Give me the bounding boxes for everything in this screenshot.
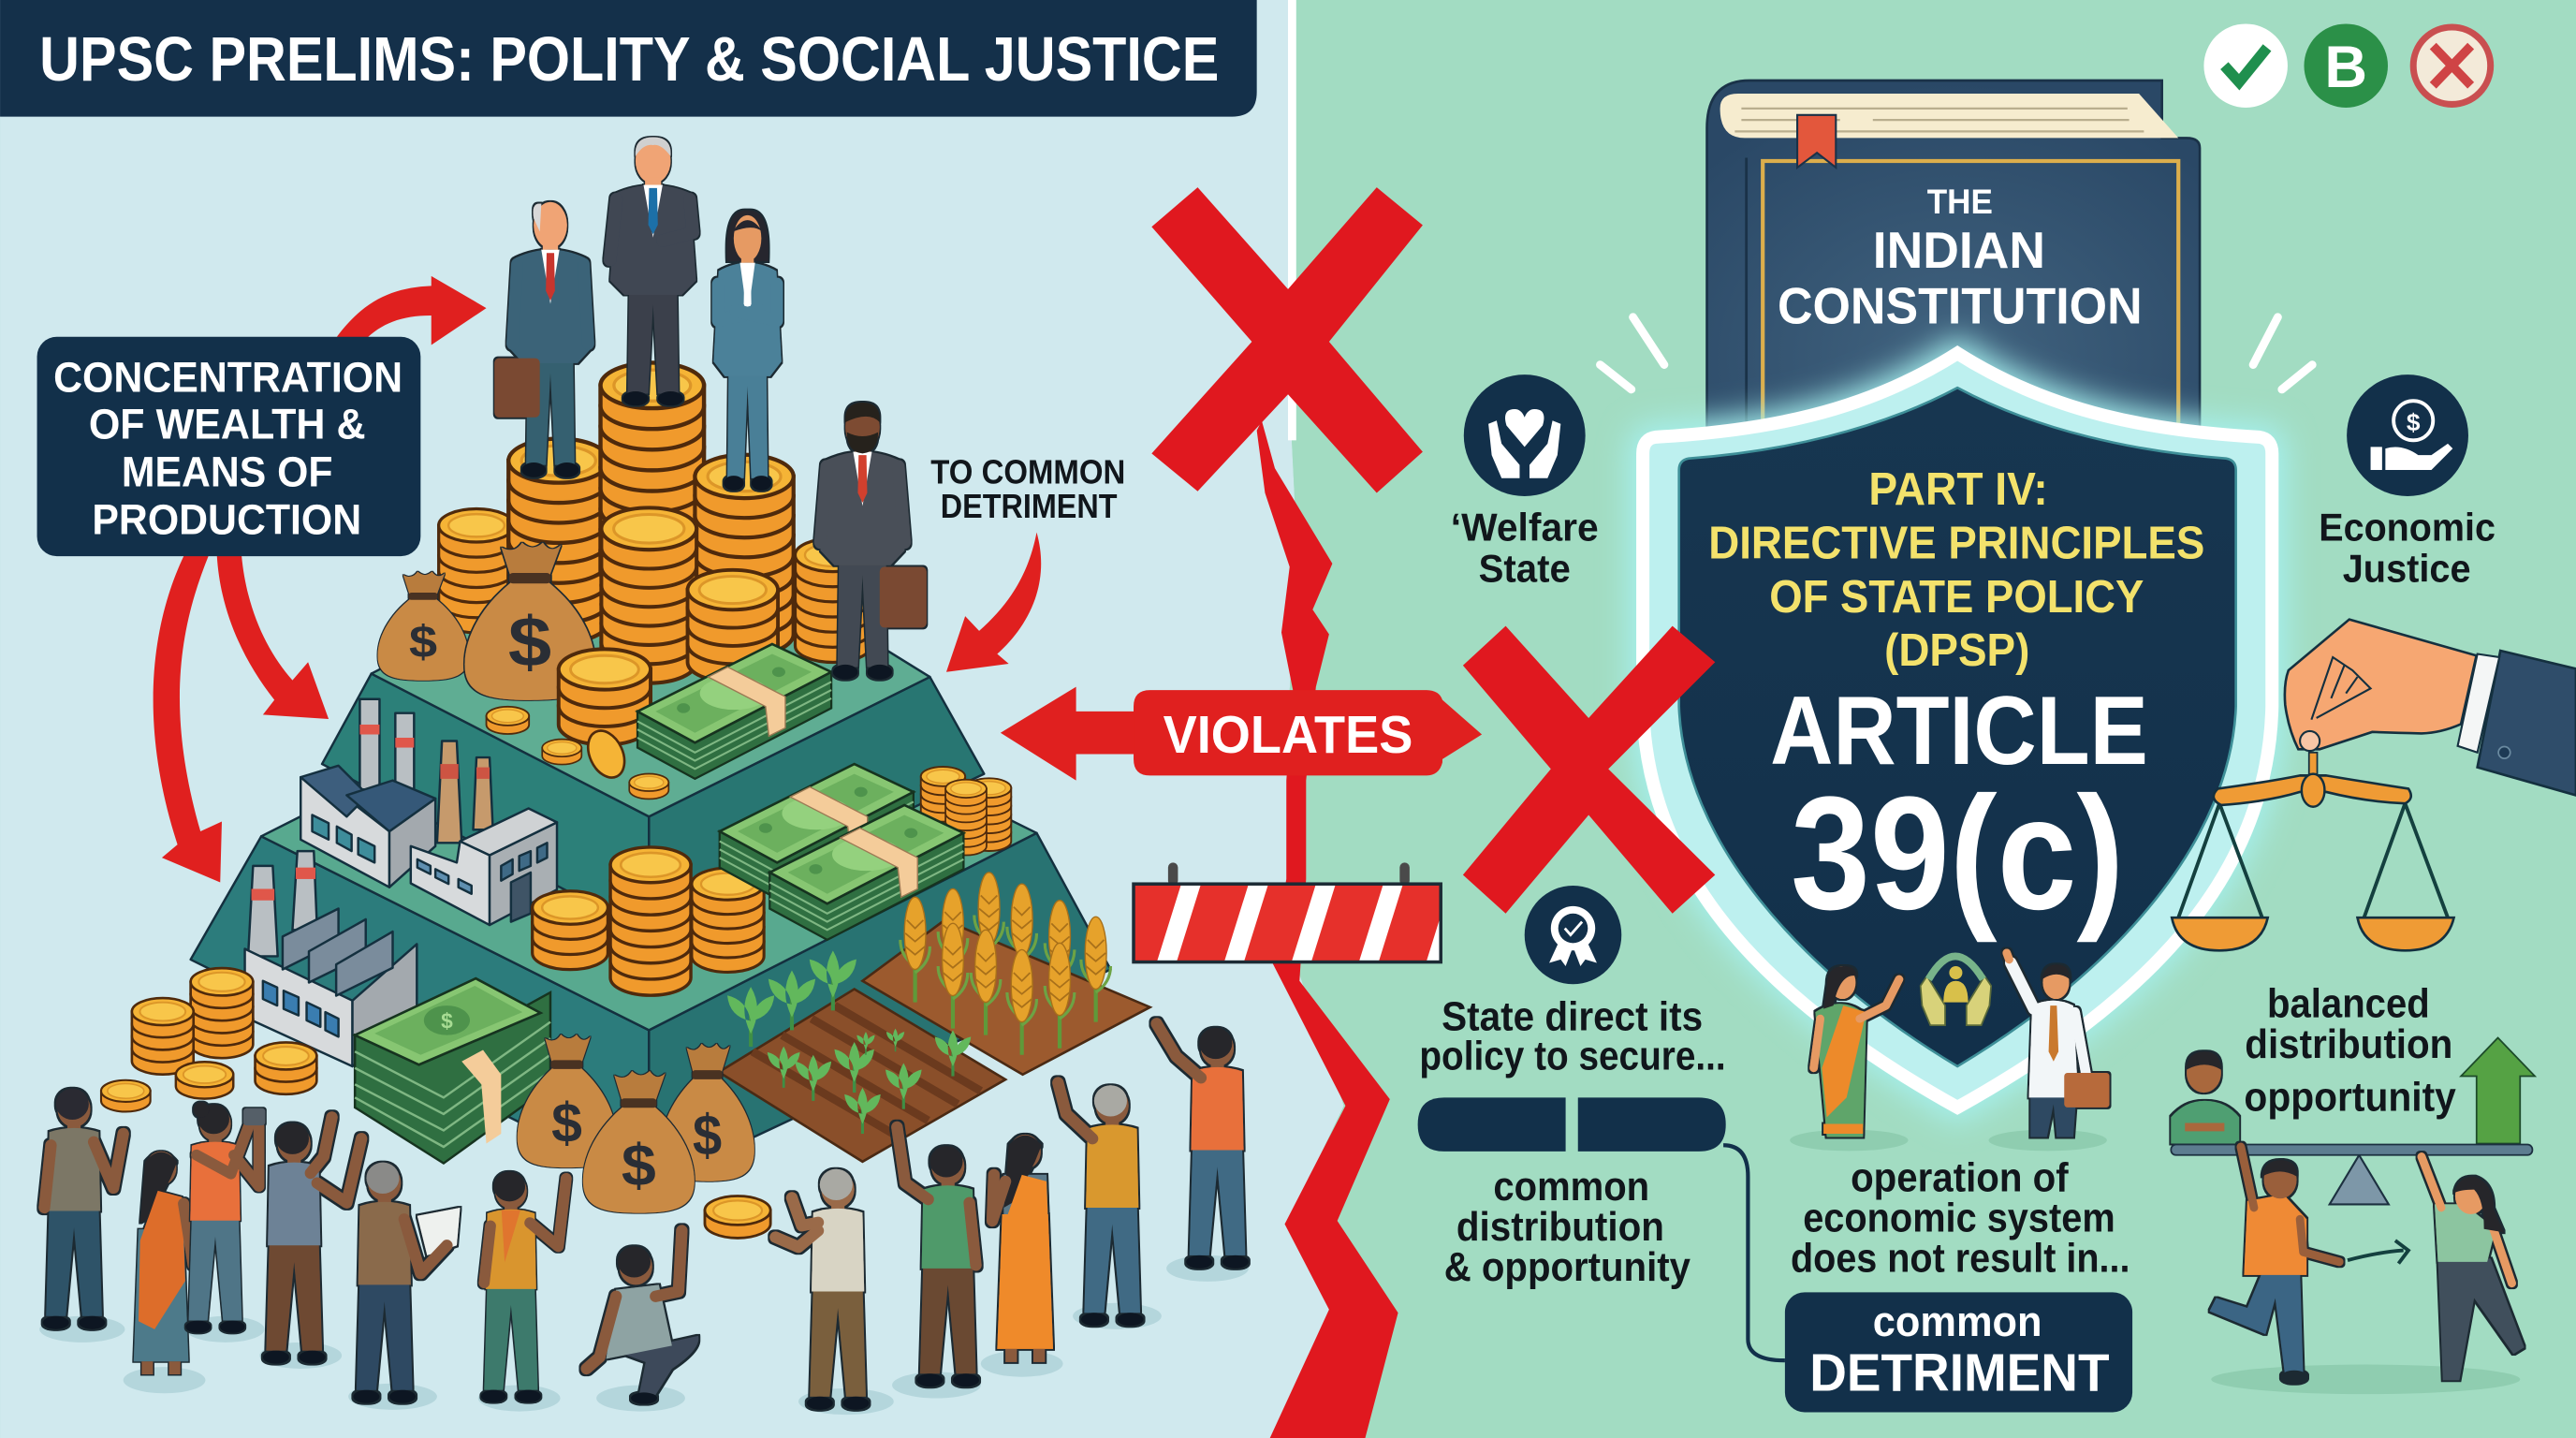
big cash bundle: $	[441, 1009, 453, 1034]
person 3: with camera	[185, 1102, 265, 1333]
runner: boy in orange	[2210, 1147, 2339, 1384]
factory: tan chimneys	[411, 741, 557, 925]
sprout field	[719, 950, 1005, 1162]
text: operation of economic system	[1791, 1154, 2130, 1281]
text: state direct its policy: State direct its	[1442, 993, 1703, 1039]
article number: 39(c)	[1791, 764, 2124, 944]
article number	[1770, 676, 2148, 944]
title banner: UPSC PRELIMS: POLITY & SOCIAL JUSTICE	[39, 25, 1219, 95]
executive: bald man with briefcase	[494, 202, 592, 477]
callout: concentration of wealth: PRODUCTION	[92, 495, 361, 543]
shield heading: (DPSP)	[1884, 625, 2029, 676]
arrow: to common detriment	[946, 533, 1041, 672]
seesaw	[2171, 1145, 2532, 1204]
label: economic justice	[2319, 505, 2496, 590]
ground shadows	[39, 1255, 1249, 1415]
shield heading: PART IV:	[1868, 464, 2048, 515]
icon: hand holding scales of justice	[2172, 620, 2576, 950]
ground shadow	[2211, 1365, 2520, 1394]
coin stacks on the middle tier	[533, 767, 1011, 995]
executive: centre man	[610, 137, 696, 405]
arrow between runners	[2348, 1240, 2408, 1264]
executive: bearded man with briefcase	[820, 403, 927, 680]
text: operation of economic system: economic system	[1803, 1196, 2115, 1241]
scales	[2178, 803, 2448, 917]
panel: right background	[1290, 0, 2576, 1438]
man with briefcase beside shield	[1989, 953, 2110, 1151]
sleeve and cuff	[2478, 651, 2576, 795]
label: to common detriment: DETRIMENT	[941, 487, 1117, 525]
callout: concentration of wealth: CONCENTRATION	[53, 354, 402, 402]
person 9	[897, 1127, 979, 1387]
arrow and banner: violates: VIOLATES	[1164, 705, 1412, 764]
text: state direct its policy: policy to secure...	[1419, 1034, 1726, 1079]
text: balanced distribution opportunity: balanced	[2267, 980, 2430, 1026]
text: common distribution and opportunity	[1444, 1164, 1691, 1290]
crowd of common people	[39, 1023, 1249, 1415]
person 4	[263, 1117, 361, 1364]
text: operation of economic system: does not result in...	[1791, 1235, 2130, 1281]
title banner	[0, 0, 1257, 117]
bookmark	[1797, 115, 1836, 168]
money bag: left top	[378, 572, 468, 681]
money bags: front group: $	[551, 1093, 582, 1154]
shield heading: DIRECTIVE PRINCIPLES	[1708, 519, 2204, 569]
factory: saw-tooth roof	[245, 851, 417, 1066]
icon: green up arrow	[2461, 1037, 2535, 1143]
icon: welfare hands and heart	[1464, 374, 1586, 496]
money bag: right top	[464, 543, 595, 700]
person 2: woman in sari	[134, 1152, 193, 1374]
person 7: crouching	[587, 1231, 698, 1404]
shield: Article 39(c)	[1628, 337, 2287, 1123]
pyramid tiers	[191, 600, 1110, 1186]
person 12	[1157, 1023, 1249, 1269]
article number: ARTICLE	[1770, 676, 2148, 785]
text: state direct its policy	[1419, 993, 1726, 1079]
panel: pyramid of wealth	[101, 137, 1150, 1238]
money bags: front group	[518, 1034, 754, 1213]
money bags: front group: $	[693, 1104, 722, 1167]
executive: woman	[713, 211, 782, 491]
callout: common detriment: DETRIMENT	[1809, 1343, 2110, 1402]
shield heading	[1708, 464, 2204, 676]
icon: protecting hands	[1921, 956, 1991, 1025]
callout: concentration of wealth: MEANS OF	[122, 448, 332, 495]
text: common distribution and opportunity: & opportunity	[1444, 1244, 1691, 1290]
panel: left background	[0, 0, 1344, 1438]
callout: common detriment: common	[1873, 1298, 2042, 1345]
label: welfare state: ‘Welfare	[1451, 505, 1599, 549]
seesaw boy	[2171, 1051, 2239, 1143]
big red X: over shield	[1463, 626, 1715, 914]
coin stacks on the top tier	[439, 362, 871, 683]
text: common distribution and opportunity: distribution	[1456, 1204, 1664, 1250]
money bags: front group: $	[622, 1132, 656, 1198]
centre white divider	[1288, 0, 1296, 440]
text: balanced distribution opportunity	[2244, 980, 2456, 1120]
money bag: right top: $	[508, 603, 551, 682]
barricade	[1132, 862, 1442, 964]
icon: money on hand	[2347, 374, 2468, 496]
badges: answer options	[2203, 23, 2491, 108]
text: balanced distribution opportunity: opportunity	[2244, 1074, 2456, 1120]
text: balanced distribution opportunity: distribution	[2245, 1021, 2452, 1067]
big cash bundle	[355, 978, 550, 1164]
red crack	[1257, 420, 1398, 1438]
label: economic justice: Justice	[2343, 546, 2471, 590]
big red X: top	[1151, 187, 1423, 493]
person 11	[1058, 1083, 1144, 1326]
text: operation of economic system: operation of	[1851, 1154, 2069, 1200]
woman beside shield	[1790, 966, 1909, 1151]
money bag: left top: $	[409, 617, 437, 667]
glow rays	[1600, 317, 2312, 389]
arrow: wealth up to elites	[337, 276, 487, 345]
person 10: woman in orange sari	[992, 1135, 1053, 1362]
arrow and banner: violates	[1001, 687, 1482, 781]
cash bundle: top tier	[637, 644, 831, 779]
factory: two dark roofs	[300, 699, 435, 888]
arrow: down to lower tier	[154, 555, 222, 882]
label: to common detriment	[930, 453, 1125, 525]
person 5: with paper	[353, 1163, 460, 1403]
book title: THE	[1927, 183, 1993, 221]
badges: answer options: B	[2324, 35, 2367, 100]
label: to common detriment: TO COMMON	[930, 453, 1125, 492]
person 8: elderly man	[775, 1169, 869, 1410]
icon: rosette medal	[1525, 886, 1621, 984]
icon: money on hand: $	[2407, 408, 2421, 436]
cash bundles: middle tier	[720, 764, 963, 940]
runner: girl in green	[2422, 1157, 2525, 1380]
connector line	[1723, 1145, 1785, 1360]
callout: concentration of wealth: OF WEALTH &	[89, 401, 366, 448]
label: welfare state	[1451, 505, 1599, 590]
label: welfare state: State	[1479, 546, 1571, 590]
callout: concentration of wealth	[37, 337, 420, 556]
text: common distribution and opportunity: common	[1493, 1164, 1649, 1210]
coins on the ground	[101, 968, 770, 1238]
shield heading: OF STATE POLICY	[1769, 572, 2144, 623]
arrow: down to upper tier	[217, 555, 329, 719]
book: the Indian Constitution	[1707, 81, 2200, 490]
blank pills	[1418, 1097, 1726, 1152]
coin stack and loose coins	[487, 649, 668, 799]
wheat field	[862, 873, 1150, 1075]
callout: common detriment	[1785, 1292, 2132, 1412]
book title: CONSTITUTION	[1778, 278, 2143, 335]
person 6	[481, 1171, 566, 1402]
person 1	[43, 1089, 124, 1329]
label: economic justice: Economic	[2319, 505, 2496, 549]
book title: INDIAN	[1873, 222, 2045, 279]
book title	[1778, 183, 2143, 335]
hand	[2285, 620, 2477, 749]
